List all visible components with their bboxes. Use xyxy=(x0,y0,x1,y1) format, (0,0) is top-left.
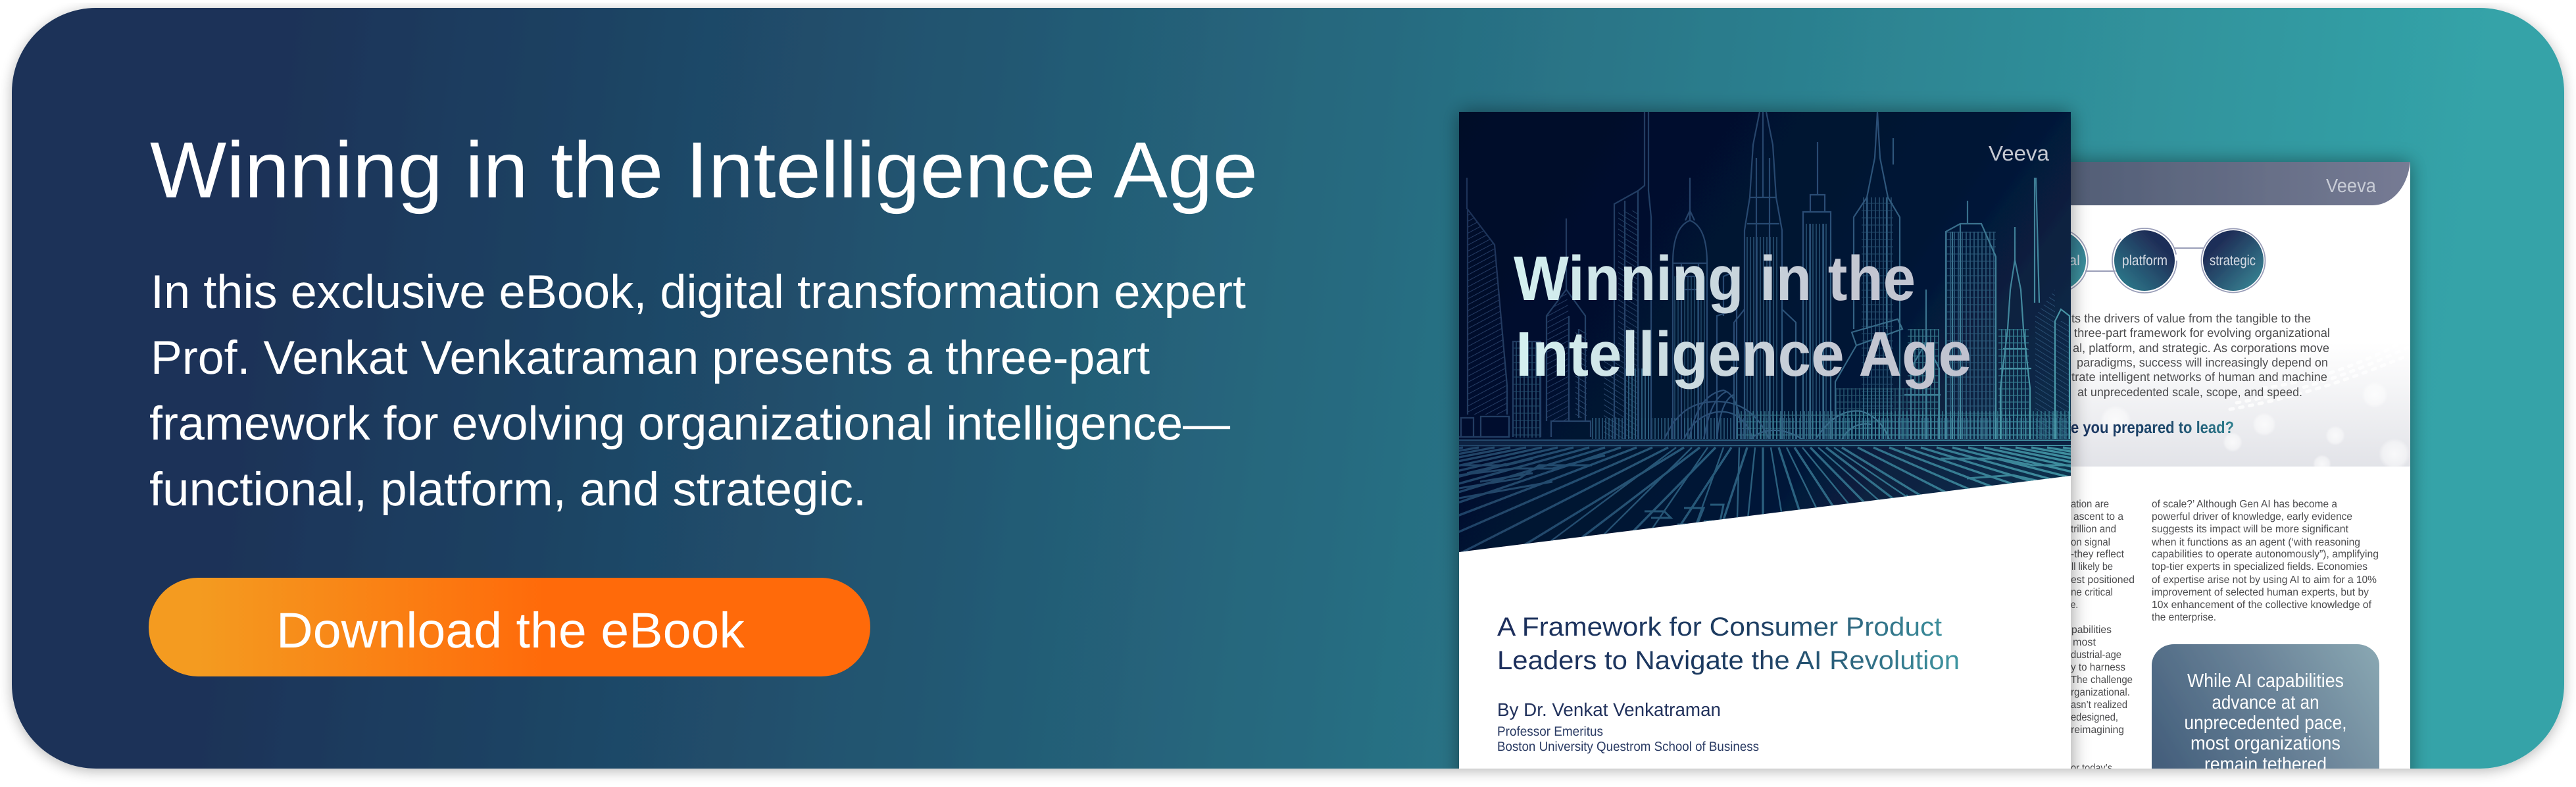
text block: right article column xyxy=(2151,499,2379,623)
text block: back page intro: at unprecedented scale, scope, and speed. xyxy=(2077,385,2302,399)
ebook mockup: back page and front cover xyxy=(1450,101,2421,769)
header band xyxy=(2071,162,2410,205)
text block: left article column: pabilities xyxy=(2071,624,2112,636)
cover title xyxy=(1514,243,1971,390)
cover subtitle: A Framework for Consumer Product xyxy=(1497,613,1942,642)
text block: left article column: ne critical xyxy=(2071,587,2113,598)
horizon strip xyxy=(1459,439,2071,447)
button: Download the eBook xyxy=(149,578,870,676)
text block: left article column: ation are xyxy=(2071,499,2109,510)
cover title: Winning in the xyxy=(1514,243,1916,314)
text block: eBook description: functional, platform, and strategic. xyxy=(149,463,866,516)
heading: Winning in the Intelligence Age: Winning in the Intelligence Age xyxy=(150,125,1258,215)
diagram: functional platform strategic circles xyxy=(2071,228,2266,293)
callout: AI capabilities quote: While AI capabilities xyxy=(2187,671,2344,692)
text block: back page intro xyxy=(2071,311,2330,399)
text block: eBook description: Prof. Venkat Venkatraman presents a three-part xyxy=(151,332,1150,384)
callout: AI capabilities quote: advance at an xyxy=(2212,692,2319,713)
text block: left article column: on signal xyxy=(2071,537,2110,548)
button: Download the eBook: Download the eBook xyxy=(276,603,745,659)
text block: left article column xyxy=(2071,499,2135,774)
text block: left article column: y to harness xyxy=(2071,662,2125,673)
author affiliation: Boston University Questrom School of Business xyxy=(1497,740,1759,754)
author affiliation xyxy=(1497,724,1759,754)
text block: eBook description: framework for evolving organizational intelligence— xyxy=(149,397,1230,450)
text block: left article column: most xyxy=(2073,637,2096,648)
text block: back page intro: trate intelligent networks of human and machine xyxy=(2071,370,2327,384)
diagram: functional platform strategic circles: platform xyxy=(2122,252,2167,268)
panel: front cover xyxy=(1450,101,2084,769)
text block: left article column: reimagining xyxy=(2071,724,2124,736)
callout: AI capabilities quote: unprecedented pace, xyxy=(2184,713,2347,734)
cover artwork: skyline and circuit floor xyxy=(1459,112,2071,552)
text block: left article column: rganizational. xyxy=(2071,687,2130,698)
diagram: functional platform strategic circles: strategic xyxy=(2210,252,2256,268)
gray bokeh section xyxy=(2071,376,2410,467)
text block: back page intro: ts the drivers of value from the tangible to the xyxy=(2071,311,2311,325)
text block: left article column: e. xyxy=(2071,599,2078,611)
skyline outlines xyxy=(1459,112,2069,440)
text block: right article column: powerful driver of knowledge, early evidence xyxy=(2152,511,2352,522)
cover title: Intelligence Age xyxy=(1516,319,1971,390)
text block: back page intro: paradigms, success will increasingly depend on xyxy=(2077,355,2328,369)
text block: left article column: or today’s xyxy=(2071,763,2112,774)
text block: right article column: improvement of selected human experts, but by xyxy=(2152,587,2369,598)
text block: eBook description xyxy=(149,266,1246,516)
text block: left article column: ll likely be xyxy=(2071,561,2113,572)
text block: back page intro: three-part framework for evolving organizational xyxy=(2074,326,2330,340)
text block: right article column: top-tier experts in specialized fields. Economies xyxy=(2152,561,2367,572)
cover subtitle xyxy=(1497,613,1960,675)
text block: right article column: of expertise arise not by using AI to aim for a 10% xyxy=(2152,574,2377,586)
callout: AI capabilities quote: most organizations xyxy=(2191,733,2341,754)
author name: By Dr. Venkat Venkatraman xyxy=(1497,699,1721,720)
callout: AI capabilities quote xyxy=(2152,644,2379,769)
cover subtitle: Leaders to Navigate the AI Revolution xyxy=(1497,646,1960,675)
text block: right article column: suggests its impact will be more significant xyxy=(2152,524,2349,535)
author affiliation: Professor Emeritus xyxy=(1497,724,1603,739)
text block: left article column: dustrial-age xyxy=(2071,649,2121,661)
text block: left article column: edesigned, xyxy=(2071,712,2118,723)
text block: left article column: asn’t realized xyxy=(2071,699,2127,711)
text block: left article column: ascent to a xyxy=(2073,511,2123,522)
text block: right article column: 10x enhancement of the collective knowledge of xyxy=(2152,599,2372,611)
text block: back page intro: al, platform, and strategic. As corporations move xyxy=(2073,341,2329,355)
logo: Veeva on back page: Veeva xyxy=(2326,176,2377,197)
text block: eBook description: In this exclusive eBook, digital transformation expert xyxy=(151,266,1246,318)
callout: AI capabilities quote: remain tethered xyxy=(2204,754,2327,775)
text block: right article column: the enterprise. xyxy=(2152,612,2216,623)
panel: back page xyxy=(2071,151,2421,769)
text block: right article column: when it functions as an agent (‘with reasoning xyxy=(2151,537,2360,548)
diagram: functional platform strategic circles: functional xyxy=(2018,252,2080,268)
text block: left article column: The challenge xyxy=(2071,674,2133,686)
text block: left article column: -they reflect xyxy=(2071,549,2125,560)
skyline hatching xyxy=(1468,197,2071,441)
text block: right article column: capabilities to operate autonomously”), amplifying xyxy=(2152,549,2379,560)
logo: Veeva on cover: Veeva xyxy=(1989,141,2049,165)
text block: left article column: est positioned xyxy=(2071,574,2135,586)
text block: left article column: trillion and xyxy=(2071,524,2116,535)
text block: right article column: of scale?’ Although Gen AI has become a xyxy=(2152,499,2337,510)
question: Are you prepared to lead?: e you prepared to lead? xyxy=(2071,419,2234,437)
circuit floor lines xyxy=(1459,446,2071,552)
